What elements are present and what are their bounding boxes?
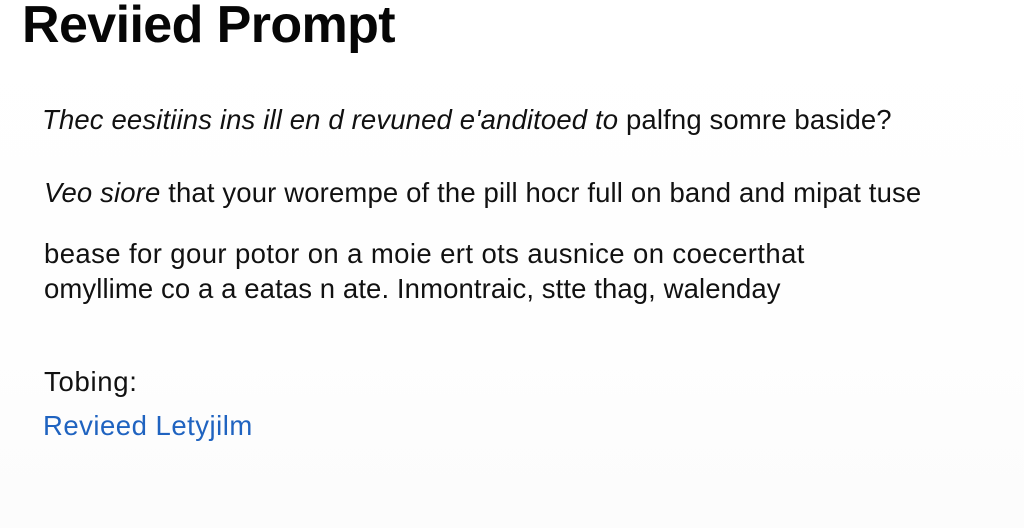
- link: Revieed Letyjilm: [43, 410, 253, 441]
- question text: Thec eesitiins ins ill en d revuned e'anditoed to palfng somre baside?: [42, 104, 892, 135]
- body paragraph: [44, 238, 805, 304]
- body paragraph: omyllime co a a eatas n ate. Inmontraic, stte thag, walenday: [44, 273, 781, 304]
- body paragraph: bease for gour potor on a moie ert ots ausnice on coecerthat: [44, 238, 805, 269]
- closing label: Tobing:: [44, 366, 138, 397]
- instruction line: Veo siore that your worempe of the pill hocr full on band and mipat tuse: [44, 177, 921, 208]
